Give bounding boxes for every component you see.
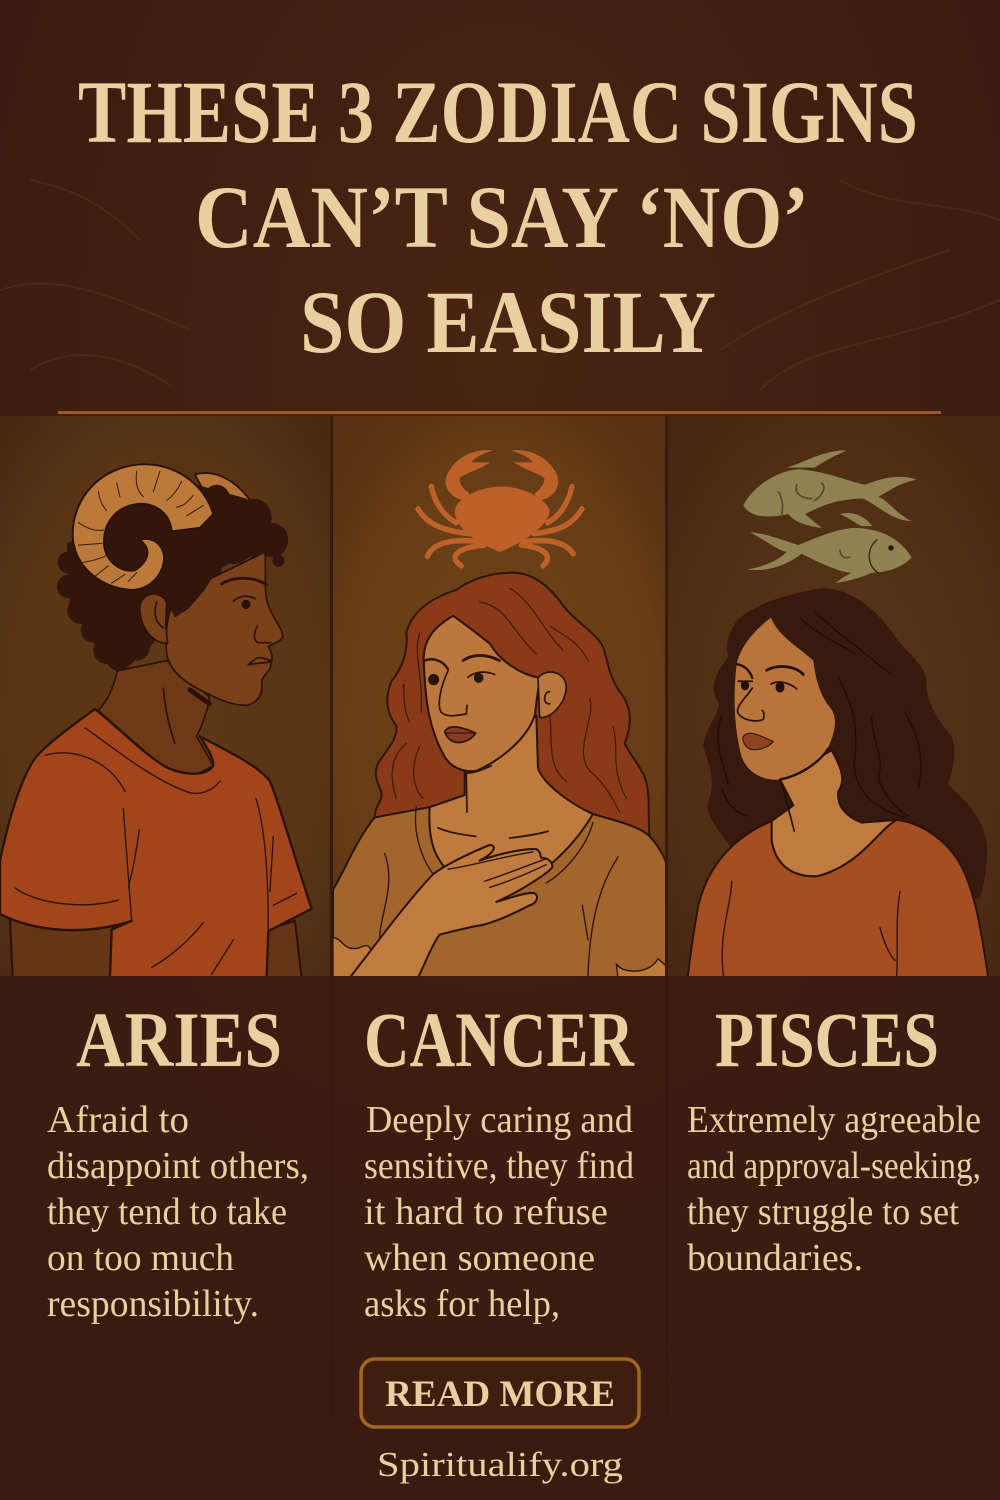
cancer face bbox=[424, 616, 540, 771]
pisces shirt bbox=[688, 820, 988, 978]
text block: cancer bbox=[364, 1099, 634, 1325]
cancer blouse folds bbox=[380, 807, 618, 976]
title: CAN’T SAY ‘NO’ bbox=[195, 169, 809, 267]
icon: crab bbox=[418, 450, 582, 566]
cancer ear bbox=[538, 672, 566, 718]
read more button bbox=[361, 1359, 639, 1427]
text block: aries: they tend to take bbox=[47, 1191, 287, 1233]
text block: cancer: it hard to refuse bbox=[364, 1191, 608, 1233]
aries shirt bbox=[0, 709, 312, 978]
panel: cancer illustration bbox=[333, 416, 668, 978]
aries shirt folds bbox=[15, 728, 297, 974]
text block: cancer: when someone bbox=[364, 1237, 595, 1279]
cancer sleeve skin bbox=[333, 938, 668, 978]
cancer hand bbox=[350, 845, 552, 978]
footer website: Spiritualify.org bbox=[377, 1445, 623, 1484]
text block: aries: responsibility. bbox=[47, 1283, 259, 1325]
panel: aries illustration bbox=[0, 416, 330, 978]
title: SO EASILY bbox=[300, 274, 716, 372]
background texture lines bbox=[0, 180, 1000, 390]
aries hair bbox=[57, 485, 288, 671]
text block: pisces: boundaries. bbox=[687, 1237, 863, 1279]
text block: pisces bbox=[687, 1099, 981, 1279]
aries horn ridges bbox=[78, 471, 203, 583]
sign names bbox=[76, 996, 939, 1083]
text block: cancer: sensitive, they find bbox=[364, 1145, 634, 1187]
cancer hair strands bbox=[392, 588, 626, 812]
aries face bbox=[166, 552, 283, 705]
aries front horn bbox=[73, 464, 213, 590]
text block: cancer: Deeply caring and bbox=[366, 1099, 633, 1141]
cancer blouse bbox=[333, 807, 668, 978]
text block: cancer: asks for help, bbox=[364, 1283, 560, 1325]
panel: pisces illustration bbox=[668, 416, 1000, 978]
text block: pisces: they struggle to set bbox=[687, 1191, 959, 1233]
pisces facial features bbox=[737, 664, 828, 831]
title bbox=[78, 64, 918, 372]
aries neck bbox=[98, 661, 213, 774]
pisces chest bbox=[772, 750, 897, 876]
read more button: READ MORE bbox=[385, 1374, 615, 1415]
icon: pisces fish pair bbox=[743, 450, 917, 583]
text block: aries: on too much bbox=[47, 1237, 234, 1279]
aries rear horn bbox=[194, 472, 250, 500]
sign names: PISCES bbox=[715, 996, 939, 1083]
sign names: ARIES bbox=[76, 996, 282, 1083]
aries arms bbox=[10, 919, 302, 978]
cancer facial features bbox=[425, 655, 550, 838]
aries hairline bbox=[170, 552, 265, 618]
aries ear bbox=[140, 594, 168, 643]
aries facial features bbox=[155, 578, 272, 743]
cancer chest bbox=[429, 716, 593, 867]
text block: pisces: Extremely agreeable bbox=[687, 1099, 981, 1141]
pisces sleeve folds bbox=[722, 881, 900, 976]
text block: aries bbox=[47, 1099, 309, 1325]
cancer hair bbox=[375, 573, 650, 836]
pisces face bbox=[735, 618, 835, 780]
text block: aries: Afraid to bbox=[47, 1099, 189, 1141]
sign names: CANCER bbox=[364, 996, 635, 1083]
pisces hair bbox=[703, 588, 987, 898]
cancer finger lines bbox=[448, 852, 546, 887]
pisces hair strands bbox=[718, 612, 921, 817]
panel separators bbox=[330, 416, 668, 1416]
divider line bbox=[58, 411, 941, 414]
text block: aries: disappoint others, bbox=[47, 1145, 309, 1187]
